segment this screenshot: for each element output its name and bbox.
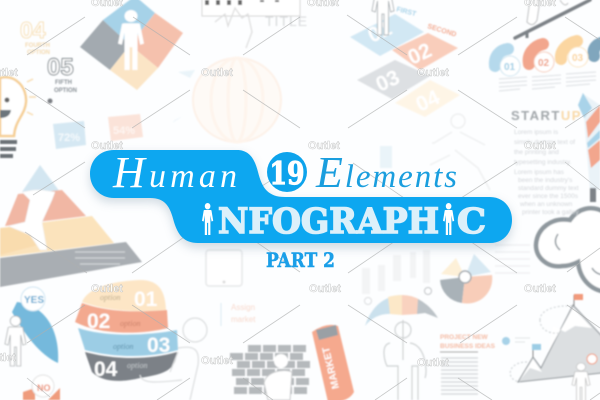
numbered options block: option — [127, 361, 147, 370]
72 percent box: 72% — [58, 132, 80, 144]
numbered arcs 01 to 03: 01 — [504, 62, 516, 73]
barber pole tie — [578, 93, 600, 202]
top right legs and board — [515, 0, 590, 38]
option 05: OPTION — [54, 88, 77, 94]
numbered options block: 01 — [134, 288, 158, 311]
numbered options block: option — [113, 342, 133, 351]
option 04: 04 — [20, 17, 46, 43]
numbered options block: 02 — [87, 310, 110, 333]
numbered arcs 01 to 03 — [495, 41, 600, 91]
isometric numbered steps: FIRST — [395, 6, 418, 18]
phone — [206, 250, 242, 286]
no bubble — [23, 375, 60, 400]
heading: Human: Human — [112, 148, 237, 197]
watermarks: Outlet — [201, 67, 233, 79]
isometric numbered steps: 03 — [372, 66, 403, 97]
umbrella — [365, 295, 438, 326]
small faded marks — [172, 70, 392, 168]
isometric numbered steps: SECOND — [426, 23, 457, 39]
option 04 — [20, 17, 50, 56]
diamond infographic with person — [80, 0, 183, 90]
brick wall with person — [230, 345, 310, 400]
isometric numbered steps — [350, 6, 460, 117]
54 percent box — [108, 114, 143, 141]
numbered options block — [75, 280, 178, 381]
hot air balloon — [193, 58, 281, 142]
numbered arcs 01 to 03: 02 — [538, 58, 550, 69]
numbered arcs 01 to 03: 03 — [572, 53, 584, 64]
person on steps — [372, 0, 394, 35]
startup body text: been the industry's — [518, 177, 573, 184]
pie chart — [440, 254, 492, 304]
cloud icon — [536, 208, 600, 292]
light bulb — [0, 77, 52, 158]
startup body text: when an unknown — [519, 201, 573, 208]
option 04: OPTION — [27, 50, 50, 56]
title label top: TITLE — [265, 13, 308, 29]
assign market text: Assign — [231, 303, 255, 312]
startup body text: Lorem ipsum has — [514, 169, 565, 176]
running person outline — [430, 114, 490, 190]
isometric numbered steps: 02 — [404, 39, 435, 70]
startup body text: printer took a galley — [522, 209, 579, 216]
icon: person as letter I left — [202, 203, 213, 235]
no bubble: NO — [37, 383, 50, 393]
numbered options block: 04 — [94, 358, 118, 381]
startup body text: ever since the 1500s — [518, 193, 579, 200]
startup body text — [514, 129, 579, 216]
heading: final letter C: C — [457, 201, 486, 242]
heading: INFOGRAPH letters: NFOGRAPH — [218, 201, 439, 242]
watermarks: Outlet — [201, 355, 233, 367]
heading: 19 badge: 19 — [270, 156, 304, 192]
yes speech shape with person: YES — [24, 295, 44, 306]
numbered options block: option — [100, 293, 120, 302]
watermarks: Outlet — [417, 67, 449, 79]
pie side text — [495, 245, 530, 273]
isometric numbered steps: 01 — [364, 17, 396, 48]
yes speech shape with person — [5, 287, 58, 366]
option 04: FOURTH — [25, 43, 50, 49]
54 percent box: 54% — [113, 125, 135, 137]
startup heading: STARTUP — [511, 108, 582, 123]
market pencil: MARKET — [321, 346, 342, 390]
person under umbrella — [384, 320, 426, 400]
person outline pushing — [140, 318, 207, 400]
startup body text: simply dummy text of — [514, 139, 575, 146]
startup body text: Lorem ipsum is — [514, 129, 559, 136]
pyramid — [0, 165, 142, 287]
subheading: part 2: PART 2 — [266, 248, 335, 272]
numbered options block: option — [120, 319, 140, 328]
watermarks: Outlet — [91, 140, 123, 152]
project heading and text: PROJECT NEW — [440, 334, 489, 341]
option 05 — [47, 54, 77, 94]
piano and hand — [202, 0, 300, 48]
project heading and text: BUSINESS IDEAS — [440, 343, 496, 350]
startup body text: standard dummy text — [518, 185, 579, 192]
startup body text: the printing and — [514, 149, 559, 156]
numbered options block: 03 — [147, 334, 170, 357]
assign market text: market — [231, 315, 256, 324]
option 05: FIFTH — [55, 80, 72, 86]
icon: person as letter I right — [443, 203, 454, 235]
heading: Elements: Elements — [315, 148, 457, 197]
watermarks: Outlet — [417, 357, 449, 369]
assign market text — [221, 303, 256, 326]
watermarks: Outlet — [308, 140, 340, 152]
title banner — [90, 150, 512, 243]
isometric numbered steps: 04 — [412, 86, 444, 117]
market pencil — [312, 325, 354, 400]
72 percent box — [53, 121, 86, 149]
watermarks: Outlet — [91, 283, 123, 295]
option 05: 05 — [47, 54, 74, 81]
title banner shadow — [90, 154, 512, 248]
startup body text: typesetting industry. — [514, 159, 572, 166]
watermarks: Outlet — [309, 283, 341, 295]
watermarks: Outlet — [524, 283, 556, 295]
mountain chart — [502, 294, 600, 400]
project heading and text — [440, 334, 496, 394]
exclamation columns — [362, 250, 432, 304]
watermarks: Outlet — [524, 140, 556, 152]
